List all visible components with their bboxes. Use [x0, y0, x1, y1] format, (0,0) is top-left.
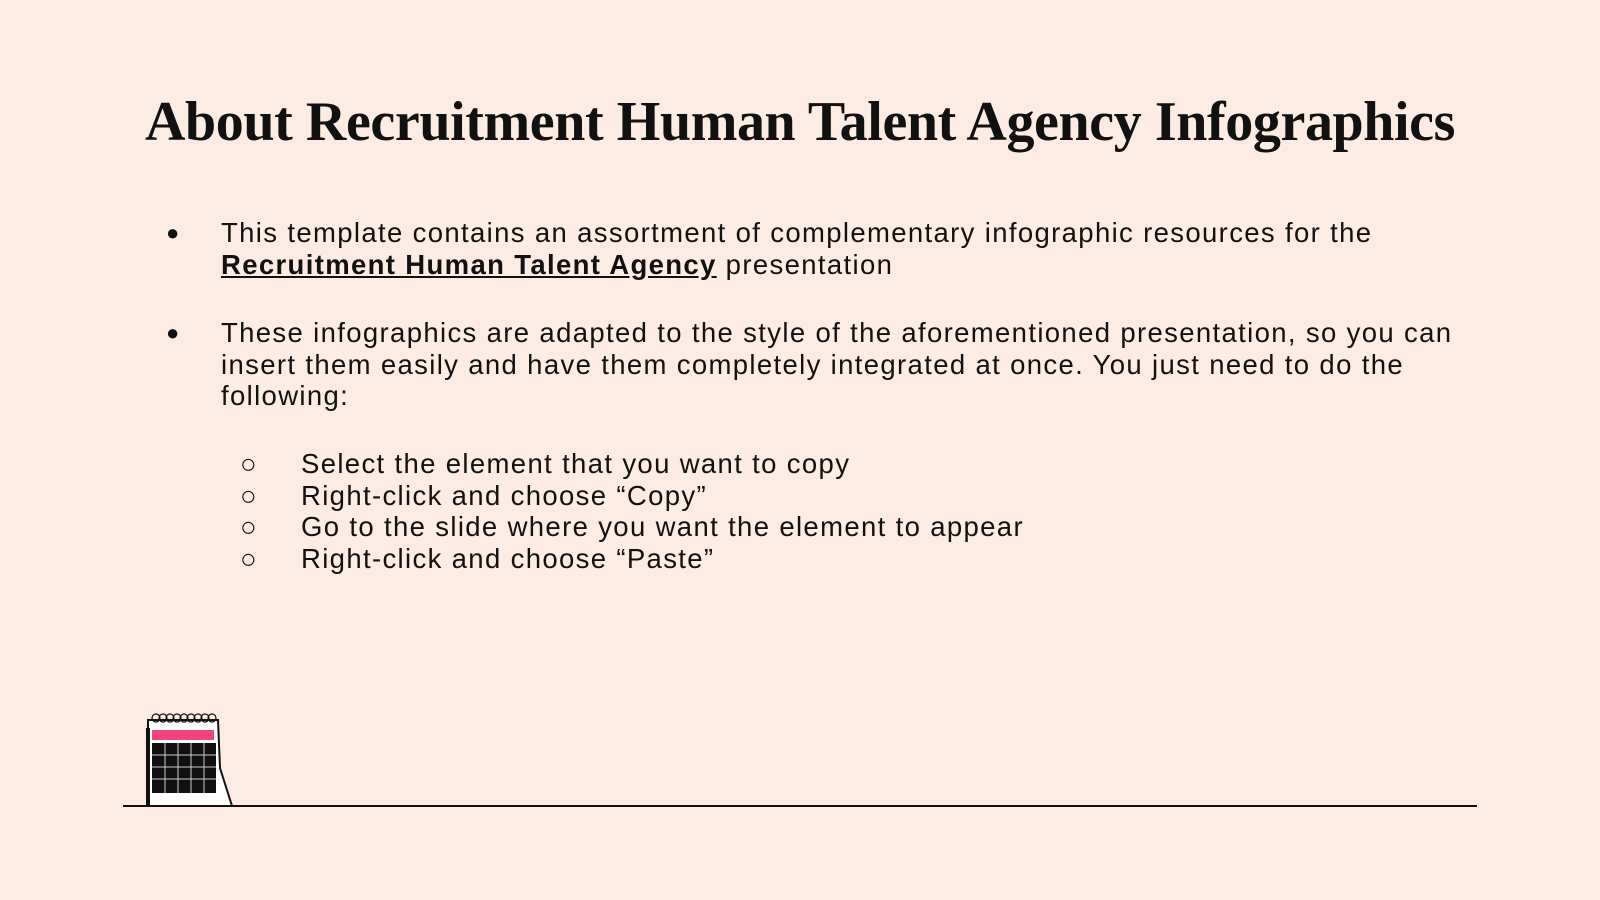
text block 2: following:: [221, 380, 349, 411]
text block 1: [221, 217, 1372, 280]
sub item 1: Select the element that you want to copy: [301, 448, 850, 479]
baseline rule: [123, 805, 1477, 807]
sub item 4: Right-click and choose “Paste”: [301, 543, 714, 574]
text block 1: Recruitment Human Talent Agency presentation: [221, 249, 893, 280]
sub-list: [240, 448, 1024, 574]
text block 2: insert them easily and have them completely integrated at once. You just need to do the: [221, 349, 1404, 380]
text block 2: These infographics are adapted to the style of the aforementioned presentation, so you can: [221, 317, 1452, 348]
bullet 2: ●: [166, 320, 179, 345]
sub item 2: Right-click and choose “Copy”: [301, 480, 707, 511]
sub item 3: ○: [240, 511, 258, 542]
sub item 2: ○: [240, 480, 258, 511]
title: About Recruitment Human Talent Agency Infographics: [145, 91, 1455, 153]
text block 1: This template contains an assortment of complementary infographic resources for the: [221, 217, 1372, 248]
icon: calendar: [146, 713, 233, 805]
text block 2: [221, 317, 1452, 411]
sub item 3: Go to the slide where you want the element to appear: [301, 511, 1024, 542]
bullet 1: ●: [166, 220, 179, 245]
sub item 4: ○: [240, 543, 258, 574]
sub item 1: ○: [240, 448, 258, 479]
